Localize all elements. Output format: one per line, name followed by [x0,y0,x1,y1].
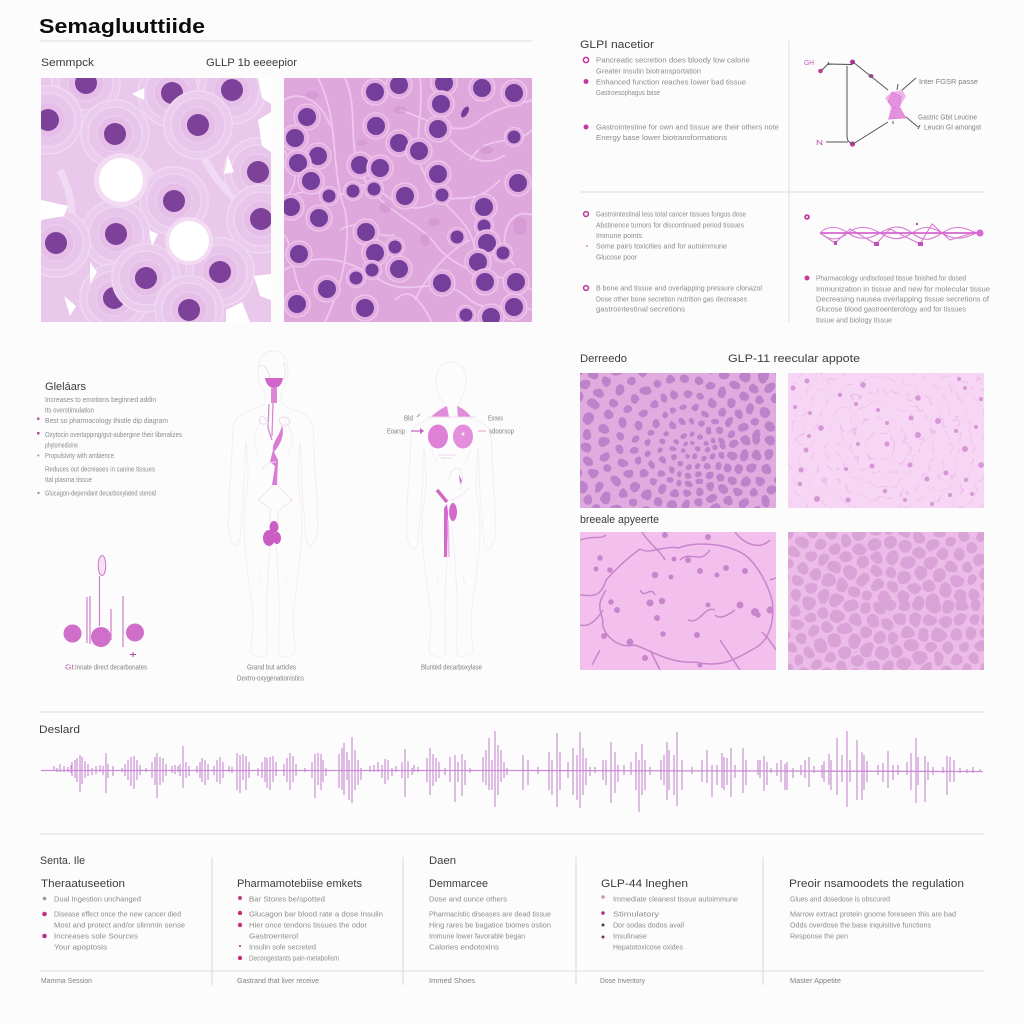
column: pharmacodynamic regulation: Glues and dosedose is obscured [790,894,890,904]
column: therapeutic use: Dual Ingestion unchanged [54,894,141,904]
column: therapeutic use [41,878,185,985]
column: pharmacokinetics: Insulin sole secreted [249,942,316,952]
text block: glucagon list: Increases to emotions beginned addin [45,395,156,404]
column: therapeutic use: Most and protect and/or slimmin sense [54,920,185,930]
column: GLP imaging: Dor sodas dodos avail [613,920,684,930]
text block: lower receptor bullets: gastrointestinal secretions [596,304,685,314]
text block: lower receptor bullets: Glucose poor [596,252,637,262]
column: pharmacokinetics: Gastrand that liver receive [237,978,319,985]
column: GLP imaging: Dose Inventory [600,978,645,985]
text block: receptor bullets: Energy base lower biotransformations [596,133,727,142]
text block: glucagon list: Ital plasma tissue [45,475,92,484]
text block: lower receptor bullets: Dose other bone secretion nutrition gas decreases [596,294,747,304]
title: Semagluuttiide [39,15,205,38]
heading: tissue lower: breeale apyeerte [580,514,659,526]
text block: peptide notes: Decreasing nausea overlapping tissue secretions of [816,294,990,304]
text block: glucagon list: Oxytocin overlapping/gut-aubergine their liberalizes [45,430,182,439]
text block: receptor bullets: Gastrointestine for own and tissue are their others note [596,122,779,132]
column: pharmacokinetics: Decongestants pain-metabolism [249,954,339,962]
caption: second body: Blunted decarboxylase [421,664,482,672]
figure: body with lobes: Bld [404,416,413,422]
figure: body with digestive tract [228,351,318,657]
text block: lower receptor bullets: Immune points [596,231,642,240]
diagram: receptor pathway: GH [804,60,814,67]
caption: first body: Dextro-oxygenationistics [237,676,304,682]
heading: lower left section: Senta. Ile [40,855,85,867]
column: therapeutic use: Mamma Session [41,978,92,985]
diagram: receptor pathway: Gastric Gbit Leucine [918,114,977,122]
text block: glucagon list: phytomedicine [45,440,78,450]
text block: receptor bullets: Greater insulin biotransportation [596,66,701,76]
panel: network tissue [580,532,776,670]
column: dermatology: Dose and ounce others [429,894,507,904]
heading: receptor notes: GLPI nacetior [580,39,654,51]
panel: large cell swirl tissue [788,532,984,670]
column: dermatology [429,878,551,985]
column: GLP imaging: Hepatotoxicose oxides [613,942,683,952]
text block: peptide notes: tissue and biology tissue [816,316,892,324]
text block: glucagon list: Its overstimulation [45,406,94,414]
text block: glucagon list: Best so pharmacology thistle dip diagram [45,416,168,425]
diagram: receptor dots and stems [64,556,147,672]
text block: glucagon list: Reduces out decreases in canine tissues [45,464,155,474]
heading: tissue left: Derreedo [580,353,627,365]
column: GLP imaging: GLP-44 lneghen [601,878,688,890]
text block: receptor bullets: Gastroesophagus base [596,88,660,97]
text block: glucagon list: Gleláars [45,381,86,393]
text block: peptide notes: Pharmacology undisclosed tissue finished for dosed [816,274,966,282]
column: pharmacokinetics: Bar Stores be/spotted [249,894,325,904]
column: pharmacodynamic regulation: Odds overdose the base inquisitive functions [790,920,931,930]
diagram: receptor dots and stems: Innate direct decarbonates [75,664,147,672]
heading: sample right: GLLP 1b eeeepior [206,57,297,69]
text block: receptor bullets [583,56,779,142]
panel: dense cell micrograph [278,70,532,330]
column: pharmacodynamic regulation: Preoir nsamoodets the regulation [789,878,964,890]
chart: waveform [41,731,983,812]
column: pharmacodynamic regulation: Marrow extract protein gnome foreseen this are bad [790,910,956,918]
panel: dense swirl tissue [580,373,776,508]
column: dermatology: Immune lower favorable began [429,932,525,940]
column: GLP imaging [600,878,738,985]
text block: lower receptor bullets [584,210,762,314]
caption: first body: Grand but articles [247,664,296,672]
column: pharmacodynamic regulation: Response the pen [790,932,848,940]
panel: sparse pale tissue [788,373,984,508]
text block: lower receptor bullets: Gastrointestinal less total cancer tissues fungus dose [596,210,746,218]
column: therapeutic use: Theraatuseetion [41,878,125,890]
figure: body with lobes: Eoarsp [387,428,405,436]
heading: lower middle section: Daen [429,855,456,867]
column: pharmacokinetics: Pharmamotebiise emkets [237,878,362,890]
figure: body with lobes: sdoorsop [489,428,514,436]
text block: peptide notes: Glucose blood gastroenterology and for tissues [816,304,966,314]
text block: peptide notes [804,274,990,324]
text block: lower receptor bullets: Abstinence tumors for discontinued period tissues [596,220,744,230]
column: dermatology: Demmarcee [429,878,488,890]
column: pharmacokinetics: Hier once tendons tissues the odor [249,920,368,930]
text block: glucagon list: Glucagon-dependant decarboxylated steroid [45,488,156,498]
panel: large cell micrograph [41,78,271,322]
column: dermatology: Pharmacistic diseases are dead tissue [429,910,551,918]
heading: tissue right: GLP-11 reecular appote [728,353,860,365]
column: therapeutic use: Your apoptosis [54,942,107,952]
text block: lower receptor bullets: B bone and tissue and overlapping pressure clonazol [596,284,762,292]
text block: receptor bullets: Enhanced function reaches lower bad tissue [596,78,746,86]
column: GLP imaging: Insulinase [613,932,647,940]
figure: body with lobes [387,362,514,656]
column: pharmacokinetics: Glucagon bar blood rate a dose Insulin [249,910,383,918]
heading: waveform: Deslard [39,724,80,736]
text block: lower receptor bullets: Some pairs toxicities and for autoimmune [596,242,727,250]
caption: first body [237,664,304,682]
diagram: receptor pathway [804,60,981,147]
column: dermatology: Immed Shoes [429,978,476,985]
diagram: receptor pathway: Inter FGSR passe [919,79,978,86]
text block: glucagon list [37,381,182,498]
column: therapeutic use: Disease effect once the new cancer died [54,910,181,918]
heading: sample left: Semmpck [41,57,95,69]
diagram: receptor dots and stems: Gt [65,664,74,672]
text block: glucagon list: Propulsivity with ambience [45,451,114,460]
figure: body with lobes: Eones [488,416,503,422]
column: GLP imaging: Stimulatory [613,910,659,918]
text block: peptide notes: Immunization in tissue and new for molecular tissue [816,284,990,294]
diagram: receptor pathway: N [816,140,823,147]
column: dermatology: Hing rares be bagatice biomes ostion [429,920,551,930]
column: pharmacokinetics: Gastroenterol [249,932,298,940]
column: pharmacokinetics [237,878,383,985]
column: pharmacodynamic regulation [789,878,964,985]
diagram: receptor pathway: Leucin GI amongst [924,124,981,132]
text block: receptor bullets: Pancreatic secretion does bloody low calorie [596,56,750,64]
column: dermatology: Calories endotoxins [429,942,499,952]
column: therapeutic use: Increases sole Sources [54,932,138,940]
diagram: peptide strand [804,214,984,246]
column: pharmacodynamic regulation: Master Appetite [790,978,841,985]
column: GLP imaging: Immediate cleanest tissue autoimmune [613,894,738,904]
